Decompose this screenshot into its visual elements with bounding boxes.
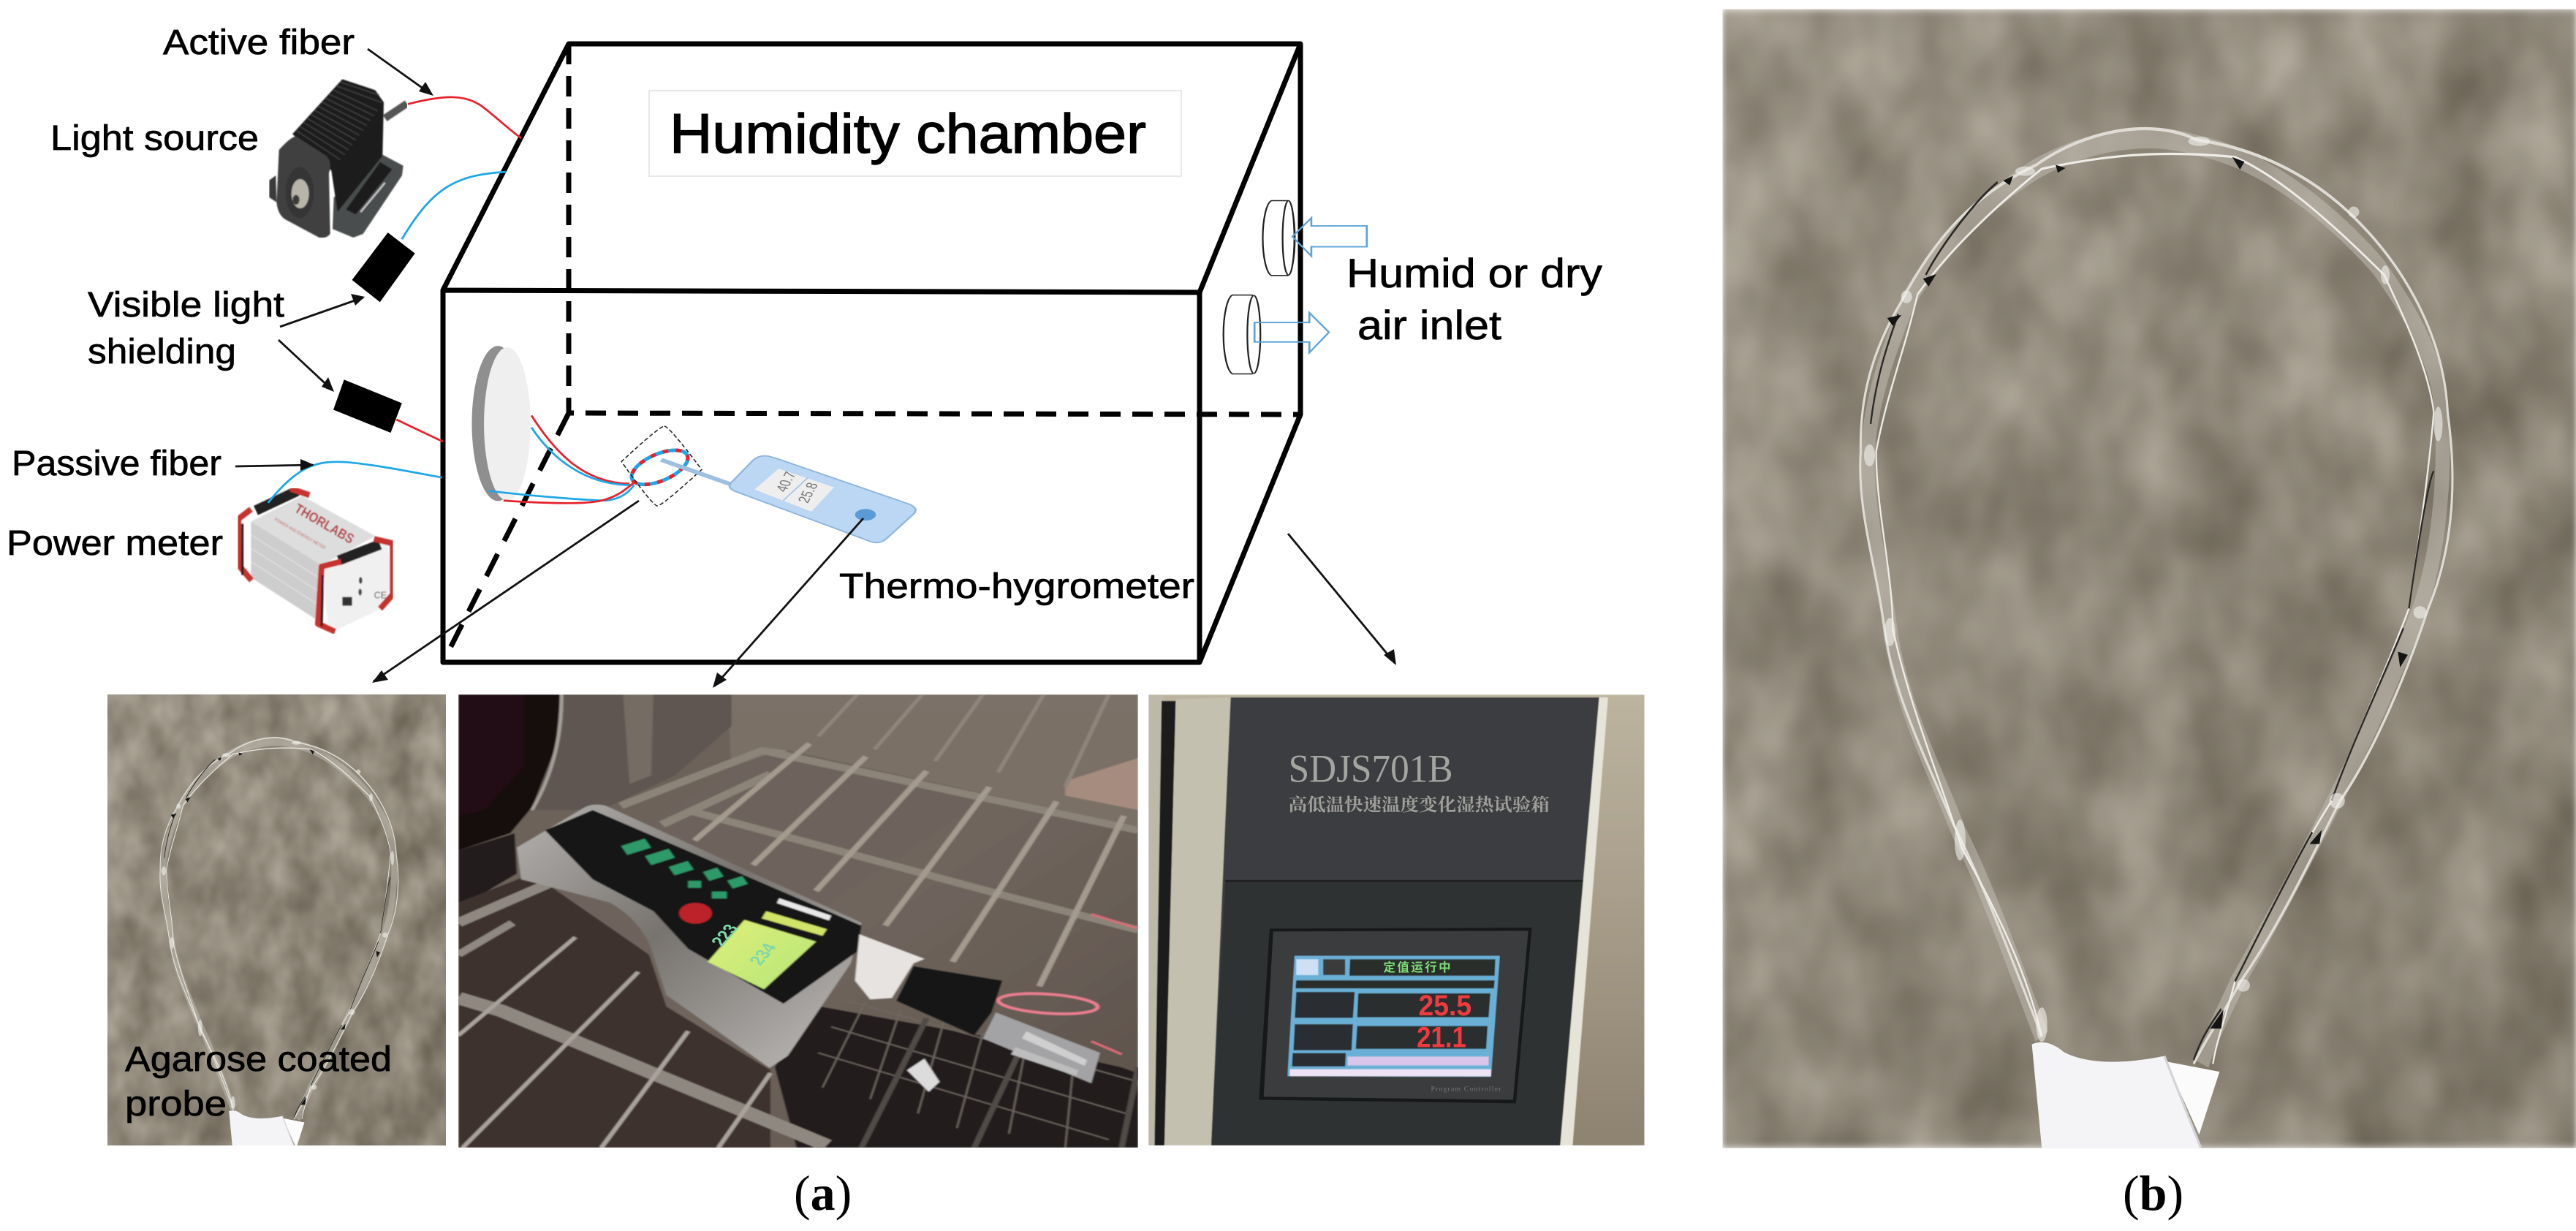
- photo: thermo-hygrometer in oven: [458, 694, 1138, 1148]
- label box: Humidity chamber: [649, 91, 1181, 176]
- label: Active fiber: Active fiber: [163, 23, 355, 62]
- label: Thermo-hygrometer: Thermo-hygrometer: [839, 567, 1194, 606]
- label: Agarose coated probe: probe: [125, 1085, 227, 1124]
- touch screen: [1287, 955, 1500, 1077]
- label: shielding: shielding: [88, 333, 236, 371]
- label: Agarose coated probe: [125, 1040, 392, 1124]
- device body: [517, 805, 862, 1068]
- label: Humid or dry: Humid or dry: [1346, 250, 1602, 296]
- label: Visible light: Visible light: [88, 286, 284, 325]
- photo: agarose coated probe (small): [105, 689, 448, 1154]
- thermo-hygrometer sketch: 40.7: [772, 470, 800, 493]
- text labels for the schematic: [7, 23, 1602, 606]
- photo: humidity chamber control panel: 21.1: [1417, 1022, 1466, 1053]
- photo: humidity chamber control panel: 25.5: [1418, 990, 1471, 1022]
- photo: thermo-hygrometer in oven: 223: [707, 922, 743, 948]
- visible light shielding blocks: [333, 232, 415, 433]
- label: Passive fiber: Passive fiber: [12, 444, 221, 483]
- label box: Humidity chamber: Humidity chamber: [670, 103, 1146, 165]
- feedthrough disk: [471, 346, 531, 501]
- fibers inside chamber and probe loop: [488, 415, 702, 506]
- photo: agarose coated probe (b): [1723, 10, 2576, 1148]
- chinese model description: 高低温快速温度变化湿热试验箱: [1289, 795, 1550, 815]
- chamber wireframe: [443, 44, 1300, 662]
- label: Power meter: Power meter: [7, 524, 223, 563]
- taped cable and pink glowing loop: [855, 934, 925, 999]
- power meter device: [238, 488, 393, 634]
- panel: chamber schematic (a): [235, 44, 1396, 688]
- power meter device: POWER AND ENERGY METER: [273, 518, 327, 551]
- label: Agarose coated probe: Agarose coated: [125, 1040, 392, 1079]
- caption (a): (a): [794, 1165, 852, 1221]
- label: air inlet: air inlet: [1357, 302, 1501, 348]
- photo: thermo-hygrometer in oven: 234: [745, 941, 781, 967]
- touch screen bezel: [1259, 928, 1532, 1103]
- photo: humidity chamber control panel: [1148, 694, 1645, 1145]
- thermo-hygrometer sketch: 25.8: [794, 481, 822, 504]
- air ports and flow arrows: [1224, 201, 1367, 374]
- arrows: [235, 49, 1396, 688]
- thermo-hygrometer sketch: [661, 456, 916, 542]
- light source device: [269, 79, 407, 238]
- power meter device: CE: [374, 590, 387, 600]
- model name: SDJS701B: [1289, 747, 1453, 790]
- fibers outside chamber: [268, 97, 521, 503]
- oven shelf bars: [458, 694, 1138, 1148]
- photo: humidity chamber control panel: 定值运行中: [1384, 961, 1451, 974]
- caption (b): (b): [2123, 1165, 2183, 1221]
- photo: humidity chamber control panel: Program Controller: [1431, 1086, 1501, 1094]
- power meter device: THORLABS: [292, 501, 357, 547]
- label: Light source: Light source: [50, 119, 259, 158]
